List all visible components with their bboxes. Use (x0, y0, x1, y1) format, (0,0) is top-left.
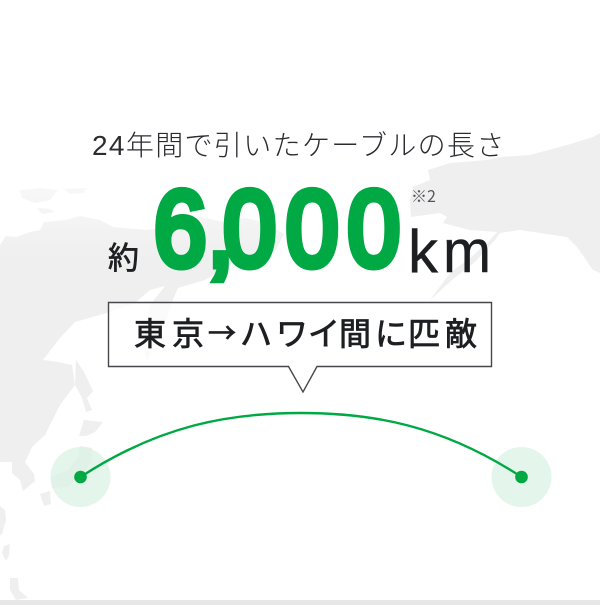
callout outline with pointer (108, 302, 492, 392)
footnote marker: ※2 (411, 183, 436, 207)
bottom band (0, 600, 600, 605)
unit: km (408, 218, 491, 285)
callout box (108, 302, 492, 392)
route: Tokyo dot (74, 471, 87, 483)
unit: km: k (408, 218, 439, 285)
route: Tokyo marker halo (50, 447, 110, 507)
map: Arctic islands (20, 188, 86, 214)
callout text: → (208, 312, 236, 352)
map: Taiwan (2, 544, 10, 561)
route arc (80, 413, 522, 477)
map: Russia and Kamchatka (0, 216, 284, 462)
route: Hawaii dot (515, 471, 528, 483)
map: Philippines (10, 578, 28, 600)
route: Hawaii marker halo (492, 447, 552, 507)
prefix: about: 約 (108, 233, 139, 278)
big number: 6,000: 6,000 (154, 170, 400, 289)
map: Honshu (51, 446, 92, 488)
callout text: 東京 (134, 309, 204, 355)
callout text: ハワイ間に匹敵 (240, 309, 477, 355)
map: Alaska (410, 133, 600, 300)
map: China coast (0, 506, 6, 535)
map: Kyushu (40, 491, 51, 506)
heading: 24年間で引いたケーブルの長さ (92, 130, 506, 161)
map: Korea (12, 462, 35, 491)
map: Hokkaido (79, 420, 103, 436)
unit: km: m (443, 218, 491, 285)
map: Sakhalin (75, 360, 93, 412)
world map background (0, 133, 600, 600)
